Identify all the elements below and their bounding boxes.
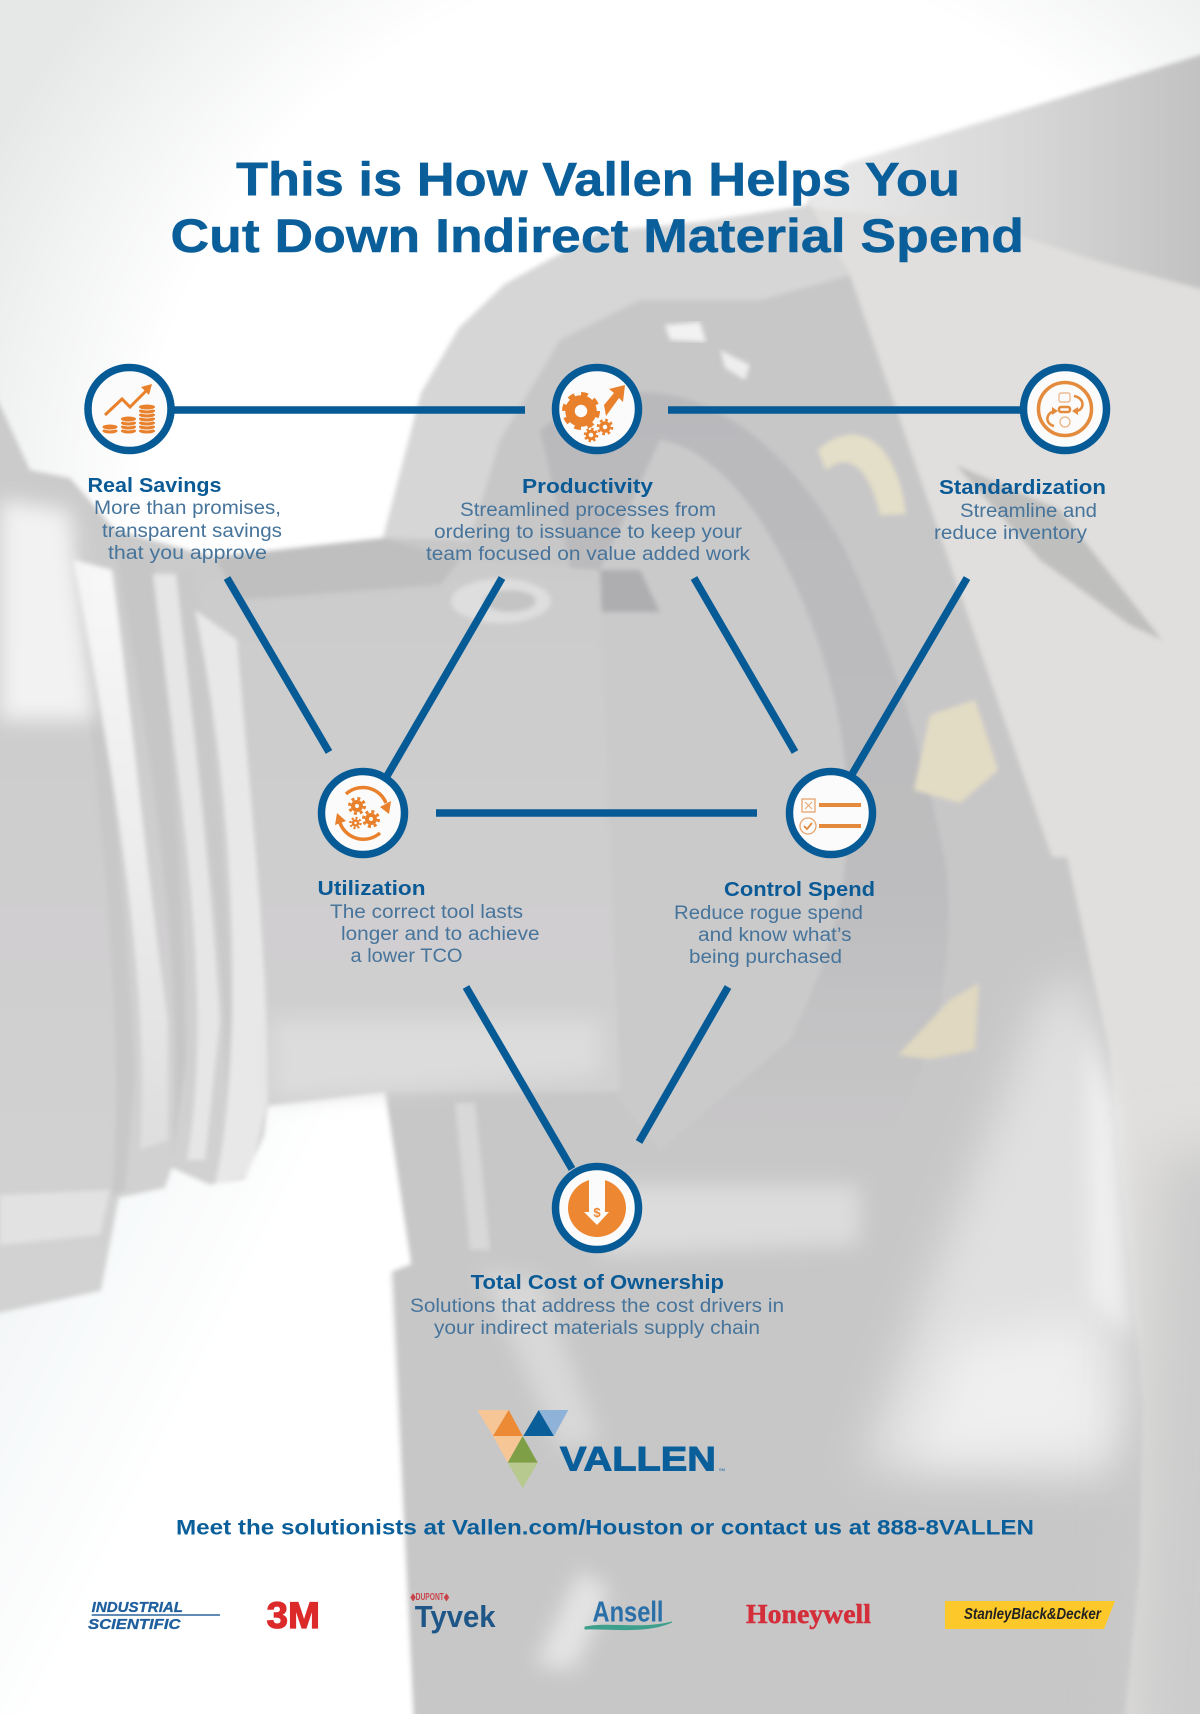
block: utilization: [318, 877, 540, 967]
background: top right grey strip: [810, 40, 1200, 305]
block: standardization: Streamline and: [960, 501, 1097, 522]
title: This is How Vallen Helps You: [236, 154, 960, 206]
icon: utilization: [322, 772, 404, 854]
block: utilization: The correct tool lasts: [330, 902, 523, 923]
title: Cut Down Indirect Material Spend: [170, 210, 1024, 263]
logo: Ansell: Ansell: [592, 1597, 664, 1629]
block: total cost of ownership: [410, 1271, 784, 1339]
logo: 3M: 3M: [267, 1595, 320, 1636]
logo: DuPont Tyvek: Tyvek: [415, 1599, 496, 1634]
logo: DuPont Tyvek: ◆DUPONT◆: [410, 1592, 449, 1603]
background: textured right surface: [385, 40, 1200, 1714]
block: control spend: being purchased: [689, 947, 842, 968]
block: productivity: Streamlined processes from: [460, 500, 716, 521]
background: spindle rings: [65, 540, 135, 1196]
logo: Vallen: SM: [719, 1467, 725, 1472]
logo: Industrial Scientific: SCIENTIFIC: [88, 1617, 181, 1633]
icon: control spend: [790, 772, 872, 854]
block: productivity: ordering to issuance to keep your: [434, 522, 743, 543]
logo: Stanley Black & Decker: StanleyBlack&Decker: [964, 1606, 1102, 1623]
call to action: Meet the solutionists at Vallen.com/Houston or contact us at 888-8VALLEN: [176, 1516, 1034, 1540]
block: standardization: [934, 476, 1106, 544]
block: real savings: that you approve: [108, 543, 267, 564]
block: standardization: reduce inventory: [934, 523, 1088, 544]
logo: Vallen: VALLEN: [560, 1441, 716, 1479]
background: dark hub ring: [540, 392, 949, 1150]
block: real savings: Real Savings: [88, 474, 222, 497]
icon: productivity: [556, 368, 638, 450]
block: utilization: a lower TCO: [350, 946, 462, 967]
icon: standardization: [1024, 368, 1106, 450]
connector lines: [172, 410, 1024, 1169]
block: productivity: [426, 475, 751, 565]
background: dome highlight: [383, 205, 850, 540]
block: control spend: Control Spend: [724, 878, 875, 901]
icon: real savings: [88, 368, 171, 450]
block: utilization: Utilization: [318, 877, 426, 900]
block: standardization: Standardization: [939, 476, 1106, 499]
block: real savings: More than promises,: [94, 498, 281, 519]
block: total cost of ownership: Solutions that address the cost drivers in: [410, 1296, 784, 1317]
logo: Honeywell: Honeywell: [746, 1599, 871, 1629]
background: dark streak on the surface: [956, 465, 1162, 640]
title: [170, 154, 1024, 263]
block: utilization: longer and to achieve: [341, 924, 540, 945]
background: left spindle: [0, 300, 620, 1323]
block: productivity: team focused on value added work: [426, 544, 751, 565]
block: total cost of ownership: your indirect materials supply chain: [434, 1318, 760, 1339]
background: white lower left: [0, 1092, 416, 1714]
logo: Industrial Scientific: [88, 1600, 220, 1633]
block: real savings: transparent savings: [102, 521, 282, 542]
background: spindle top shadow: [214, 538, 460, 600]
background: dome and central body: [268, 205, 1143, 1714]
icon: total cost of ownership: [556, 1166, 638, 1250]
block: control spend: [674, 878, 875, 968]
block: control spend: and know what’s: [698, 925, 852, 946]
logo: Industrial Scientific: INDUSTRIAL: [92, 1600, 183, 1616]
background: hub inner face: [600, 440, 848, 1150]
icon: total cost of ownership: $: [593, 1205, 601, 1220]
background: striated blade: [860, 970, 1140, 1480]
block: total cost of ownership: Total Cost of Ownership: [471, 1271, 724, 1294]
logo: Vallen: [477, 1410, 725, 1488]
block: control spend: Reduce rogue spend: [674, 903, 863, 924]
background: yellowed inserts: [818, 435, 906, 515]
block: productivity: Productivity: [522, 475, 654, 498]
block: real savings: [88, 474, 282, 564]
logo: Stanley Black & Decker: [945, 1601, 1115, 1629]
background: bolt: [451, 579, 551, 623]
